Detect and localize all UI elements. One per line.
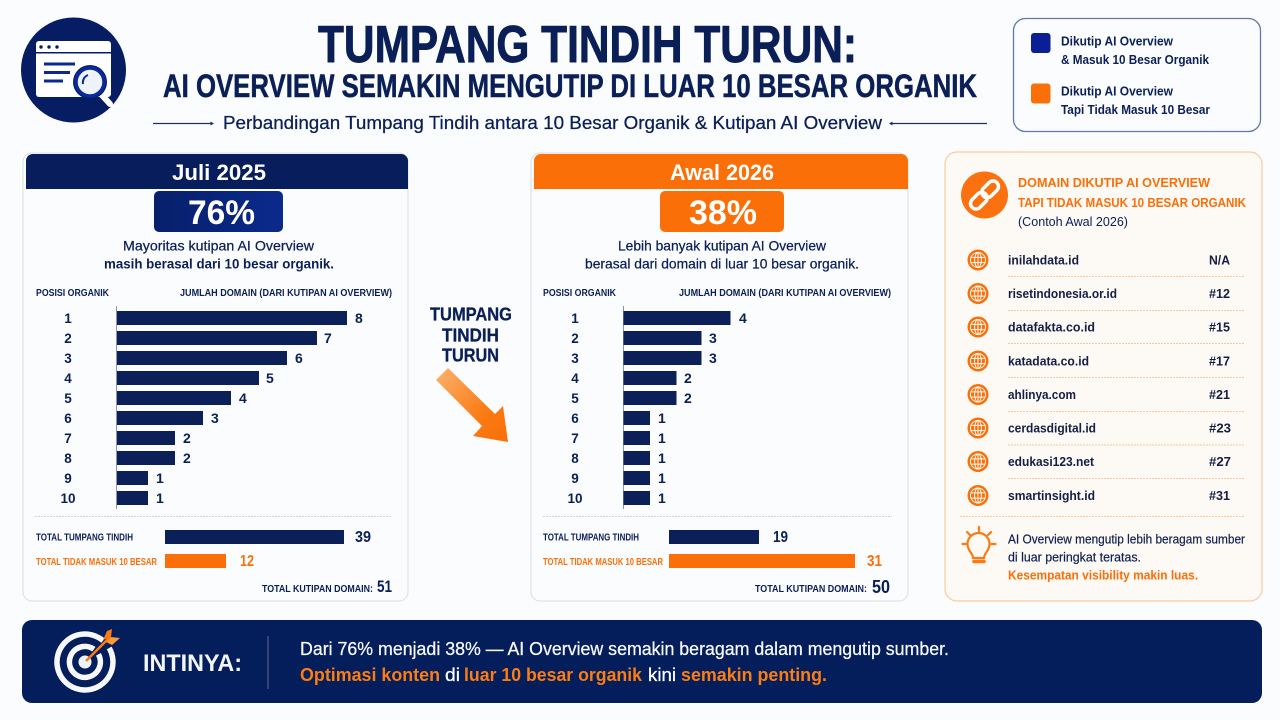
- banner message: Dari 76% menjadi 38% — AI Overview semakin beragam dalam mengutip sumber.: [300, 639, 949, 659]
- bar chart: posisi organik Juli 2025: 3: [211, 410, 219, 426]
- bar chart: posisi organik Awal 2026: 2: [684, 370, 692, 386]
- domain list rows: #31: [1209, 488, 1230, 503]
- bar chart: posisi organik Juli 2025: 2: [183, 450, 191, 466]
- banner message: [300, 639, 949, 685]
- bar chart: posisi organik Awal 2026: 1: [658, 450, 666, 466]
- bar chart: posisi organik Awal 2026: 1: [658, 430, 666, 446]
- domain list rows: #15: [1209, 320, 1230, 334]
- bar chart: posisi organik Juli 2025: 7: [324, 330, 332, 346]
- bar chart: posisi organik Awal 2026: 3: [571, 351, 579, 366]
- bar chart: posisi organik Awal 2026: POSISI ORGANIK: [543, 288, 617, 299]
- bar chart: posisi organik Awal 2026: 9: [571, 471, 579, 486]
- panel header: Juli 2025: [26, 154, 408, 189]
- domain list rows: datafakta.co.id: [1008, 320, 1095, 334]
- insight note: [1008, 532, 1246, 582]
- bar chart: posisi organik Juli 2025: 2: [183, 430, 191, 446]
- insight note: AI Overview mengutip lebih beragam sumber: [1008, 532, 1246, 546]
- insight note: Kesempatan visibility makin luas.: [1008, 568, 1198, 582]
- icon: chain link: [961, 172, 1008, 218]
- totals Awal 2026: 31: [867, 553, 882, 570]
- bar chart: posisi organik Awal 2026: 4: [739, 310, 747, 326]
- description: [585, 238, 859, 272]
- bar chart: posisi organik Juli 2025: 8: [355, 310, 363, 326]
- insight note: di luar peringkat teratas.: [1008, 550, 1141, 564]
- stat: 76%: [154, 191, 283, 232]
- title: [163, 16, 977, 104]
- bar chart: posisi organik Juli 2025: 5: [64, 391, 72, 406]
- bar chart: posisi organik Awal 2026: 5: [571, 391, 579, 406]
- bar chart: posisi organik Juli 2025: 1: [156, 490, 164, 506]
- bar chart: posisi organik Juli 2025: 9: [64, 471, 72, 486]
- domain list rows: smartinsight.id: [1008, 488, 1095, 503]
- bar chart: posisi organik Juli 2025: 5: [266, 370, 274, 386]
- banner label: INTINYA:: [143, 650, 242, 677]
- domain list rows: cerdasdigital.id: [1008, 420, 1096, 436]
- totals Juli 2025: TOTAL TUMPANG TINDIH: [36, 532, 133, 544]
- stat: 38%: 38%: [689, 194, 757, 232]
- totals Juli 2025: 51: [377, 577, 392, 596]
- banner: intinya: [22, 620, 1262, 703]
- legend: Dikutip AI Overview: [1061, 34, 1173, 48]
- domain list rows: N/A: [1209, 252, 1231, 268]
- arrow callout: tumpang tindih turun: TUMPANG: [430, 304, 512, 324]
- title: AI OVERVIEW SEMAKIN MENGUTIP DI LUAR 10 BESAR ORGANIK: [163, 68, 977, 104]
- panel header: Juli 2025: Juli 2025: [172, 160, 266, 185]
- stat: 76%: 76%: [188, 194, 255, 232]
- bar chart: posisi organik Juli 2025: 8: [64, 451, 72, 466]
- totals Awal 2026: TOTAL TIDAK MASUK 10 BESAR: [543, 557, 664, 568]
- banner message: luar 10 besar organik: [464, 665, 643, 685]
- bar chart: posisi organik Awal 2026: 6: [571, 411, 579, 426]
- domain list rows: ahlinya.com: [1008, 387, 1076, 402]
- bar chart: posisi organik Awal 2026: 4: [571, 371, 579, 386]
- panel heading: [1018, 175, 1247, 229]
- bar chart: posisi organik Juli 2025: 1: [156, 470, 164, 486]
- arrow callout: tumpang tindih turun: [430, 304, 512, 442]
- banner message: kini: [648, 665, 676, 685]
- panel: Juli 2025: [23, 153, 408, 601]
- panel header: Awal 2026: Awal 2026: [670, 160, 774, 185]
- domain list rows: #21: [1209, 387, 1230, 402]
- domain list rows: inilahdata.id: [1008, 252, 1079, 268]
- bar chart: posisi organik Awal 2026: 2: [684, 390, 692, 406]
- description: berasal dari domain di luar 10 besar organik.: [585, 256, 859, 272]
- panel: domain list: [945, 152, 1262, 601]
- bar chart: posisi organik Awal 2026: 3: [709, 330, 717, 346]
- subtitle with arrows: Perbandingan Tumpang Tindih antara 10 Besar Organik & Kutipan AI Overview: [223, 113, 883, 133]
- bar chart: posisi organik Juli 2025: 10: [60, 491, 76, 506]
- bar chart: posisi organik Awal 2026: 1: [571, 311, 579, 326]
- domain list rows: #12: [1209, 286, 1230, 301]
- bar chart: posisi organik Awal 2026: 7: [571, 431, 579, 446]
- stat: 38%: [660, 191, 784, 232]
- icon: light bulb: [962, 527, 996, 562]
- banner message: Optimasi konten: [300, 665, 440, 685]
- banner message: di: [445, 665, 460, 685]
- totals Awal 2026: 19: [773, 529, 788, 546]
- legend: Tapi Tidak Masuk 10 Besar: [1061, 103, 1210, 117]
- legend: [1014, 18, 1260, 132]
- bar chart: posisi organik Juli 2025: JUMLAH DOMAIN (DARI KUTIPAN AI OVERVIEW): [180, 288, 392, 299]
- panel heading: DOMAIN DIKUTIP AI OVERVIEW: [1018, 175, 1211, 190]
- bar chart: posisi organik Awal 2026: JUMLAH DOMAIN (DARI KUTIPAN AI OVERVIEW): [679, 288, 891, 299]
- domain list rows: #27: [1209, 454, 1231, 469]
- bar chart: posisi organik Juli 2025: 2: [64, 331, 72, 346]
- totals Juli 2025: 39: [355, 529, 371, 546]
- totals Awal 2026: 50: [872, 577, 890, 597]
- totals Juli 2025: 12: [240, 553, 254, 570]
- domain list rows: [968, 250, 1245, 506]
- banner message: semakin penting.: [681, 665, 827, 685]
- bar chart: posisi organik Awal 2026: [543, 288, 891, 509]
- totals Awal 2026: TOTAL TUMPANG TINDIH: [543, 532, 639, 544]
- description: masih berasal dari 10 besar organik.: [104, 256, 334, 272]
- icon: target with dart: [57, 629, 120, 690]
- bar chart: posisi organik Juli 2025: [36, 288, 392, 509]
- bar chart: posisi organik Juli 2025: 7: [64, 431, 72, 446]
- panel header: Awal 2026: [534, 154, 908, 189]
- totals Juli 2025: [36, 529, 392, 596]
- bar chart: posisi organik Awal 2026: 8: [571, 451, 579, 466]
- panel heading: (Contoh Awal 2026): [1018, 215, 1128, 229]
- domain list rows: edukasi123.net: [1008, 454, 1095, 469]
- totals Juli 2025: TOTAL KUTIPAN DOMAIN:: [262, 584, 373, 595]
- bar chart: posisi organik Juli 2025: 4: [239, 390, 247, 406]
- bar chart: posisi organik Juli 2025: 6: [64, 411, 72, 426]
- bar chart: posisi organik Juli 2025: 3: [64, 351, 72, 366]
- bar chart: posisi organik Awal 2026: 3: [709, 350, 717, 366]
- bar chart: posisi organik Juli 2025: POSISI ORGANIK: [36, 288, 110, 299]
- domain list rows: risetindonesia.or.id: [1008, 286, 1117, 301]
- bar chart: posisi organik Awal 2026: 1: [658, 410, 666, 426]
- totals Awal 2026: [543, 529, 890, 597]
- icon: browser window with magnifier: [21, 18, 126, 122]
- bar chart: posisi organik Awal 2026: 1: [658, 490, 666, 506]
- bar chart: posisi organik Juli 2025: 4: [64, 371, 72, 386]
- panel heading: TAPI TIDAK MASUK 10 BESAR ORGANIK: [1018, 195, 1247, 210]
- title: TUMPANG TINDIH TURUN:: [318, 16, 857, 74]
- bar chart: posisi organik Juli 2025: 6: [295, 350, 303, 366]
- domain list rows: katadata.co.id: [1008, 354, 1089, 368]
- legend: Dikutip AI Overview: [1061, 84, 1173, 98]
- description: [104, 238, 334, 272]
- description: Mayoritas kutipan AI Overview: [123, 238, 315, 254]
- description: Lebih banyak kutipan AI Overview: [618, 238, 827, 254]
- arrow callout: tumpang tindih turun: TURUN: [442, 346, 499, 366]
- bar chart: posisi organik Awal 2026: 2: [571, 331, 579, 346]
- bar chart: posisi organik Juli 2025: 1: [64, 311, 72, 326]
- panel: Awal 2026: [531, 153, 908, 601]
- totals Juli 2025: TOTAL TIDAK MASUK 10 BESAR: [36, 557, 158, 568]
- domain list rows: #23: [1209, 420, 1231, 436]
- domain list rows: #17: [1209, 354, 1230, 368]
- totals Awal 2026: TOTAL KUTIPAN DOMAIN:: [755, 584, 867, 595]
- arrow callout: tumpang tindih turun: TINDIH: [442, 326, 499, 346]
- legend: & Masuk 10 Besar Organik: [1061, 53, 1209, 67]
- bar chart: posisi organik Awal 2026: 10: [567, 491, 583, 506]
- bar chart: posisi organik Awal 2026: 1: [658, 470, 666, 486]
